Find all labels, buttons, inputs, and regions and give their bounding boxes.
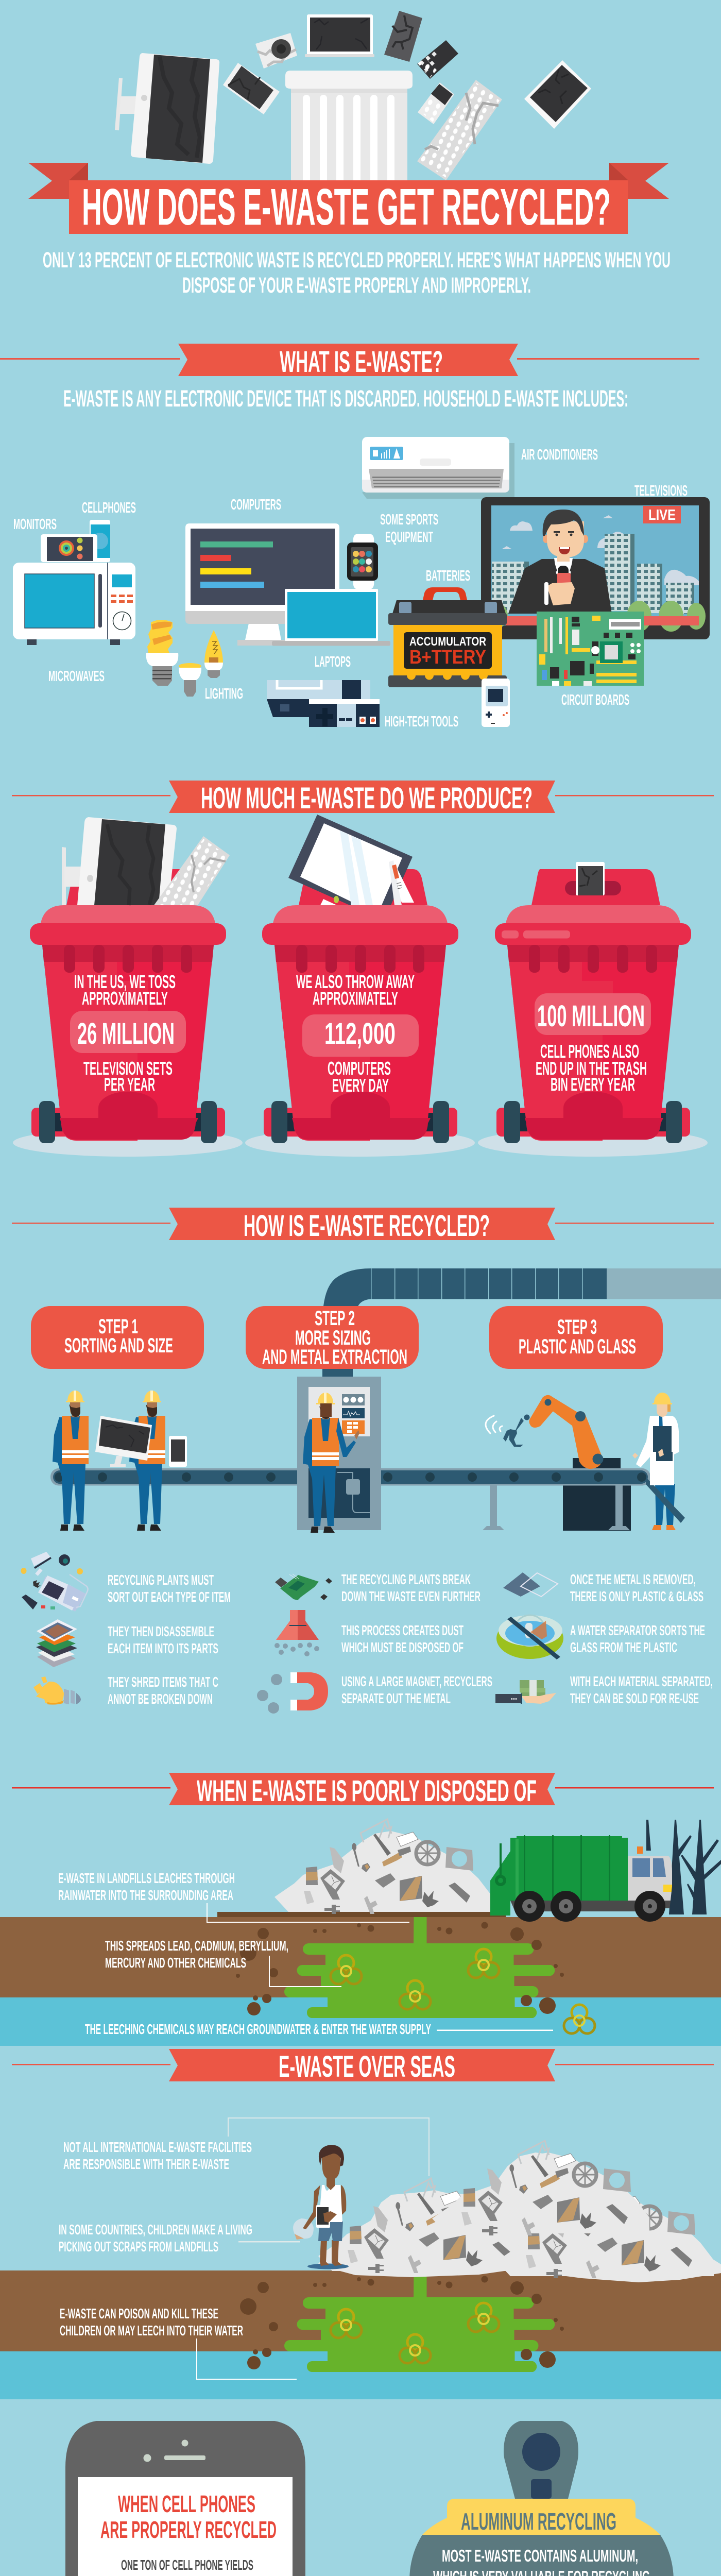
water layer: [0, 2351, 721, 2399]
label: batteries: BATTERIES: [426, 568, 470, 584]
section heading: how is e-waste recycled: [12, 1208, 714, 1243]
text: plants break down further: THE RECYCLING PLANTS BREAK: [341, 1571, 471, 1587]
section heading: what is e-waste: [0, 344, 699, 379]
icon: trash can: [285, 71, 413, 180]
text: computers every day: COMPUTERS: [328, 1058, 391, 1079]
text: once metal is removed: [570, 1571, 703, 1604]
icon: exploded microwave and parts: [21, 1552, 88, 1612]
callout: spreads chemicals: MERCURY AND OTHER CHEMICALS: [105, 1955, 246, 1971]
text: we also throw away: WE ALSO THROW AWAY: [296, 971, 415, 992]
icon: light bulbs: [146, 620, 223, 697]
icon: laptop: [272, 589, 390, 646]
label: monitors: MONITORS: [13, 516, 57, 533]
icon: broken laptop: [305, 14, 374, 57]
text: television sets per year: [83, 1058, 173, 1095]
panel: landfill cross-section: [0, 1819, 721, 2046]
callout: landfill leaches: [58, 1870, 409, 1922]
label: computers: COMPUTERS: [231, 497, 281, 513]
icon: desktop computer: [185, 523, 339, 646]
text: large magnet: SEPARATE OUT THE METAL: [341, 1690, 451, 1706]
icon: landfill pile: [217, 1819, 506, 1917]
icon: tablet and device in bin: [288, 815, 414, 905]
text: large magnet: USING A LARGE MAGNET, RECYCLERS: [341, 1673, 492, 1689]
icon: circuit board: [537, 612, 644, 686]
text: plants break down further: [341, 1571, 480, 1604]
text: cell phones also end up in the trash: [536, 1041, 647, 1095]
icon: machine operator: [303, 1393, 359, 1533]
icon: television with news anchor: [481, 497, 710, 639]
step 1 label: SORTING AND SIZE: [64, 1334, 173, 1357]
text: disassemble: [108, 1623, 218, 1656]
icon: biohazard in water: [564, 2005, 595, 2033]
heading: when cell phones are properly recycled: [100, 2490, 277, 2543]
icon: smartwatch: [347, 534, 378, 589]
icon: phone body: [65, 2421, 305, 2576]
section heading: e-waste over seas: E-WASTE OVER SEAS: [279, 2050, 455, 2083]
icon: circuit board and chips: [275, 1574, 332, 1600]
text: shred items: ANNOT BE BROKEN DOWN: [108, 1691, 213, 1707]
label: lighting: LIGHTING: [205, 686, 243, 702]
step 2 label: AND METAL EXTRACTION: [262, 1346, 407, 1368]
label: air conditioners: AIR CONDITIONERS: [521, 447, 598, 463]
icon: can tab: [504, 2421, 578, 2499]
step 3 label: [489, 1306, 663, 1369]
text: in the US we toss: [74, 971, 176, 1009]
icon: child holding a phone: [293, 2145, 349, 2269]
icon: microwave: [13, 563, 135, 645]
section heading: when e-waste is poorly disposed of: [12, 1773, 714, 1808]
text: disassemble: THEY THEN DISASSEMBLE: [108, 1623, 214, 1639]
icon: broken keyboard: [417, 80, 502, 180]
callout: spreads chemicals: [105, 1938, 341, 1987]
soil layer: [0, 2270, 721, 2351]
step 1 label: STEP 1: [98, 1315, 138, 1338]
stat: 112,000: [302, 1014, 419, 1057]
intro text: [43, 248, 671, 298]
panel: trash bin computers: [245, 815, 475, 1157]
icon: dead trees: [646, 1820, 721, 1914]
text: process creates dust: THIS PROCESS CREATES DUST: [341, 1622, 464, 1638]
icon: car battery: [388, 587, 507, 687]
icon: water separator: [496, 1615, 563, 1659]
text: computers every day: EVERY DAY: [332, 1075, 389, 1096]
icon: car battery: ACCUMULATOR: [409, 635, 486, 649]
callout: not all facilities: [63, 2118, 429, 2176]
text: process creates dust: WHICH MUST BE DISPOSED OF: [341, 1639, 464, 1655]
section heading: how is e-waste recycled: HOW IS E-WASTE RECYCLED?: [244, 1209, 490, 1243]
section heading: what is e-waste: WHAT IS E-WASTE?: [280, 345, 443, 379]
icon: slot with cell phone: [502, 862, 621, 939]
callout: not all facilities: NOT ALL INTERNATIONAL E-WASTE FACILITIES: [63, 2139, 252, 2155]
icon: scientist: [632, 1393, 685, 1530]
text: recycling plants must sort: [108, 1572, 231, 1605]
icon: robot stand and legs: [483, 1458, 631, 1531]
text: we also throw away: APPROXIMATELY: [313, 988, 398, 1009]
soil layer: [0, 1917, 721, 1997]
stat: 26 million: [70, 1011, 186, 1053]
label: circuit boards: CIRCUIT BOARDS: [561, 692, 629, 708]
text: television sets per year: PER YEAR: [104, 1074, 155, 1095]
icon: shredded bulb: [33, 1676, 81, 1705]
step 2 label: [246, 1306, 419, 1369]
label: some sports equipment: SOME SPORTS: [380, 512, 438, 528]
icon: can body: [409, 2499, 674, 2576]
icon: red bin base: [13, 869, 243, 1157]
icon: broken large tablet: [524, 60, 591, 129]
water layer: [0, 1997, 721, 2046]
icon: monitor and keyboard in bin: [62, 817, 230, 905]
icon: air conditioner: [362, 437, 514, 499]
text: computers every day: [328, 1058, 391, 1096]
icon: red bin base: [245, 869, 475, 1157]
text: process creates dust: [341, 1622, 464, 1655]
icon: extraction machine: [297, 1377, 381, 1530]
illustration: electronics falling into a trash can: [115, 11, 591, 180]
callout: children make a living: [59, 2222, 300, 2255]
icon: car battery: B+TTERY: [409, 647, 486, 668]
icon: broken keypad phone: [417, 40, 458, 79]
text: television sets per year: TELEVISION SETS: [83, 1058, 173, 1079]
icon: conveyor belt: [50, 1468, 650, 1486]
text: cell phones also end up in the trash: BIN EVERY YEAR: [551, 1074, 635, 1095]
icon: ventilation duct: [322, 1268, 721, 1377]
callout: spreads chemicals: THIS SPREADS LEAD, CADMIUM, BERYLLIUM,: [105, 1938, 288, 1954]
title banner: [28, 163, 669, 236]
panel: overseas e-waste scene: [0, 2118, 721, 2399]
text: in the US we toss: APPROXIMATELY: [82, 988, 168, 1009]
panel: household e-waste types: [13, 437, 710, 730]
icon: broken dark smartphone: [384, 11, 422, 62]
text: disassemble: EACH ITEM INTO ITS PARTS: [108, 1640, 218, 1656]
step 1 label: [31, 1306, 204, 1369]
icon: sorting worker 2: [129, 1391, 165, 1531]
heading: when cell phones are properly recycled: ARE PROPERLY RECYCLED: [100, 2516, 277, 2543]
icon: large trash pile: [317, 2141, 721, 2282]
label: laptops: LAPTOPS: [315, 654, 351, 670]
panel: phone with recycling yields: [65, 2421, 305, 2576]
icon: smartphones: [41, 520, 110, 562]
text: recycling plants must sort: SORT OUT EACH TYPE OF ITEM: [108, 1589, 231, 1605]
step 2 label: MORE SIZING: [295, 1327, 371, 1349]
callout: poison and kill: [60, 2306, 297, 2379]
label: high-tech tools: HIGH-TECH TOOLS: [385, 714, 458, 730]
icon: broken camera: [255, 33, 297, 69]
callout: landfill leaches: E-WASTE IN LANDFILLS LEACHES THROUGH: [58, 1870, 235, 1886]
callout: landfill leaches: RAINWATER INTO THE SURROUNDING AREA: [58, 1887, 233, 1903]
icon: robot arm: [486, 1395, 604, 1469]
icon: broken white phone: [418, 82, 454, 124]
text: we also throw away: [296, 971, 415, 1009]
icon: leaching chemical plume: [236, 1917, 564, 2018]
text: materials sold for re-use: [570, 1673, 713, 1706]
label: some sports equipment: EQUIPMENT: [385, 529, 433, 546]
icon: television with news anchor: LIVE: [648, 507, 676, 523]
icon: plastic and glass: [503, 1572, 558, 1597]
section heading: e-waste over seas: [12, 2049, 714, 2083]
icon: leaching chemical plume: [236, 2271, 564, 2372]
panel: step details: [21, 1552, 713, 1714]
callout: not all facilities: ARE RESPONSIBLE WITH THEIR E-WASTE: [63, 2156, 229, 2172]
step 3 label: STEP 3: [557, 1316, 597, 1338]
icon: broken desktop monitor: [115, 53, 219, 164]
icon: disassembled phone layers: [36, 1619, 77, 1667]
icon: video game console: [267, 680, 380, 727]
icon: garbage truck: [490, 1835, 673, 1922]
callout: groundwater: THE LEECHING CHEMICALS MAY REACH GROUNDWATER & ENTER THE WATER SUPPLY: [85, 2021, 431, 2037]
callout: poison and kill: E-WASTE CAN POISON AND KILL THESE: [60, 2306, 218, 2321]
text: shred items: [108, 1674, 218, 1707]
text: shred items: THEY SHRED ITEMS THAT C: [108, 1674, 218, 1690]
heading: when cell phones are properly recycled: WHEN CELL PHONES: [118, 2490, 255, 2517]
panel: trash bin televisions: [13, 817, 243, 1157]
text: plants break down further: DOWN THE WASTE EVEN FURTHER: [341, 1588, 480, 1604]
stat: 26 million: 26 MILLION: [77, 1017, 175, 1050]
icon: sorting worker 1: [53, 1391, 89, 1531]
text: in the US we toss: IN THE US, WE TOSS: [74, 971, 176, 992]
icon: front tree trunks: [669, 1863, 707, 1914]
text: recycling plants must sort: RECYCLING PLANTS MUST: [108, 1572, 214, 1588]
panel: trash bin cell phones: [478, 862, 708, 1157]
stat: 112,000: 112,000: [324, 1017, 396, 1050]
icon: magnet attracting metal: [257, 1672, 328, 1714]
text: most e-waste contains aluminum: [433, 2546, 650, 2576]
icon: dust extraction hood: [274, 1610, 319, 1656]
label: cellphones: CELLPHONES: [82, 500, 136, 516]
text: one ton of cell phone yields: ONE TON OF CELL PHONE YIELDS: [121, 2557, 253, 2573]
text: water separator sorts: [570, 1622, 705, 1655]
stat: 100 million: 100 MILLION: [537, 999, 645, 1033]
icon: handheld game console: [482, 679, 510, 727]
panel: recycling plant scene: [31, 1268, 721, 1533]
icon: hand holding money: [495, 1680, 556, 1704]
callout: children make a living: IN SOME COUNTRIES, CHILDREN MAKE A LIVING: [59, 2222, 252, 2238]
icon: discarded monitor and tablet: [95, 1416, 187, 1467]
stat: 100 million: [535, 993, 651, 1035]
icon: red bin base: [478, 869, 708, 1157]
step 2 label: STEP 2: [315, 1307, 355, 1330]
label: microwaves: MICROWAVES: [48, 668, 105, 685]
text: large magnet: [341, 1673, 492, 1706]
icon: broken tablet: [223, 63, 280, 114]
callout: children make a living: PICKING OUT SCRAPS FROM LANDFILLS: [59, 2239, 218, 2255]
panel: aluminum can recycling: [409, 2421, 674, 2576]
label: some sports equipment: [380, 512, 438, 546]
callout: poison and kill: CHILDREN OR MAY LEECH INTO THEIR WATER: [60, 2323, 243, 2338]
